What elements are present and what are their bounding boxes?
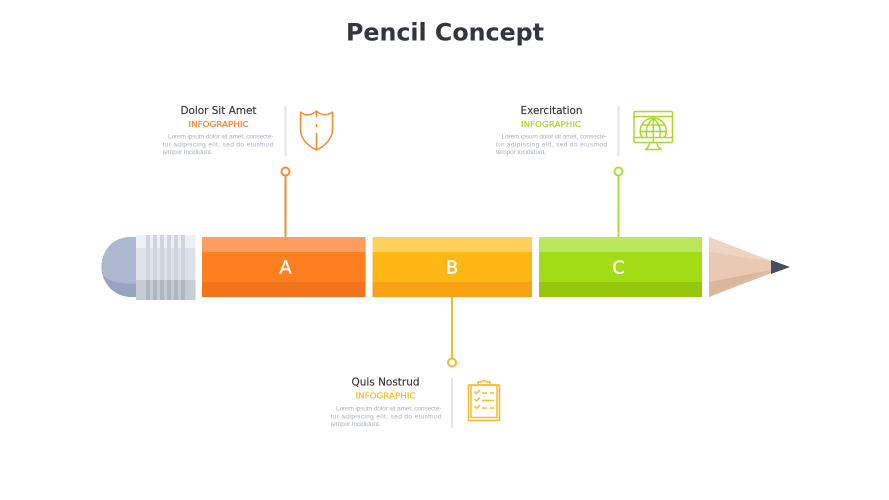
text block: Quis Nostrud: Quis Nostrud (352, 376, 420, 388)
text block: Exercitation: Exercitation (520, 104, 583, 117)
text block: Dolor Sit Amet: tempor incididunt. (162, 149, 213, 156)
text block: Dolor Sit Amet: Lorem ipsum dolor sit amet, consecte- (168, 134, 274, 140)
text block: Dolor Sit Amet: tur adipiscing elit, sed do eiusmod (162, 142, 274, 148)
segment B: B (446, 258, 458, 278)
icon: clipboard checklist (468, 380, 500, 420)
text block: Dolor Sit Amet: Dolor Sit Amet (180, 104, 257, 117)
connector C (614, 168, 622, 237)
text block: Quis Nostrud (330, 376, 442, 428)
text block: Exercitation: Lorem ipsum dolor sit amet, consecte- (502, 134, 607, 140)
text block: Exercitation (496, 104, 607, 156)
pencil tip (709, 237, 790, 297)
divider A (284, 106, 286, 156)
segment C (539, 237, 702, 297)
title: Pencil Concept (346, 18, 544, 46)
icon: monitor globe (634, 112, 672, 150)
text block: Exercitation: INFOGRAPHIC (521, 120, 581, 129)
segment B (372, 237, 532, 297)
text block: Exercitation: tur adipiscing elit, sed do eiusmod (496, 142, 607, 148)
text block: Quis Nostrud: INFOGRAPHIC (356, 392, 416, 400)
connector B (448, 297, 456, 366)
segment A: A (279, 258, 292, 278)
pencil (102, 235, 790, 300)
text block: Dolor Sit Amet (162, 104, 274, 156)
divider C (618, 106, 620, 156)
text block: Dolor Sit Amet: INFOGRAPHIC (188, 120, 249, 129)
text block: Quis Nostrud: tur adipiscing elit, sed do eiusmod (330, 414, 442, 420)
segment A (202, 237, 366, 297)
text block: Exercitation: tempor incididunt. (496, 149, 546, 156)
ferrule (136, 235, 196, 300)
text block: Quis Nostrud: Lorem ipsum dolor sit amet, consecte- (336, 406, 442, 412)
segment C: C (612, 258, 625, 278)
eraser (102, 237, 136, 297)
text block: Quis Nostrud: tempor incididunt. (330, 421, 381, 428)
divider B (451, 378, 453, 428)
icon: shield (300, 111, 332, 150)
connector A (282, 168, 290, 237)
